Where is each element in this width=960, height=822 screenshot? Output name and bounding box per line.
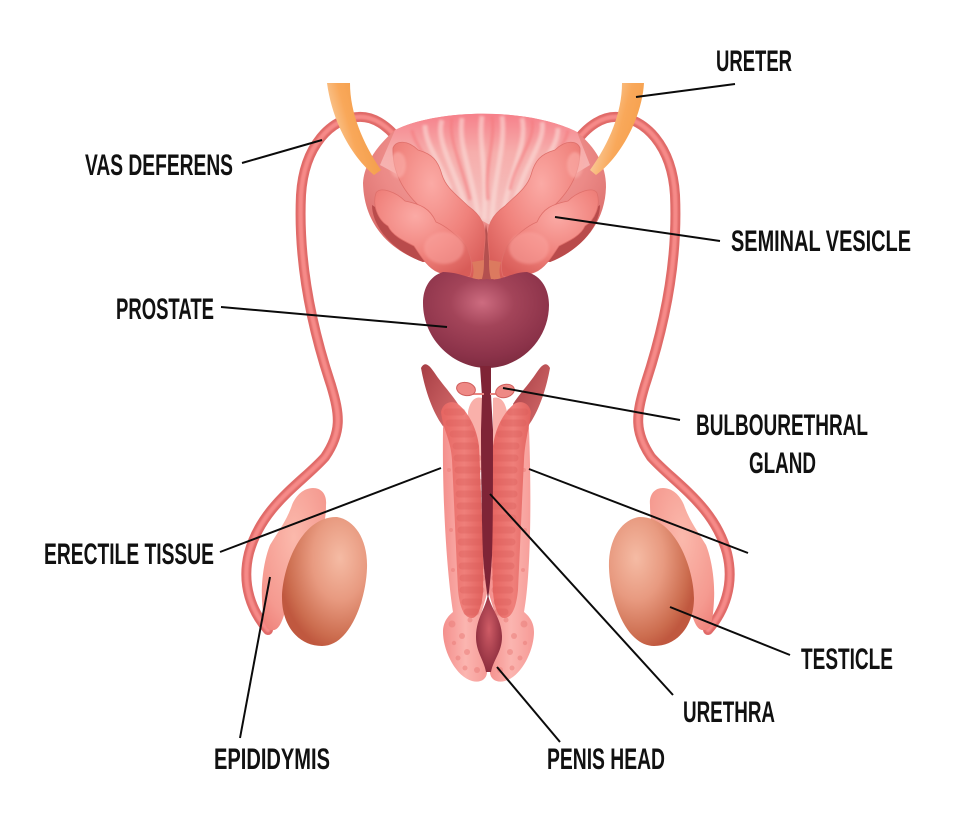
right ureter [590, 83, 644, 175]
label: bulbourethral gland: GLAND [749, 447, 816, 480]
right seminal vesicle [488, 142, 598, 280]
bulbourethral glands [455, 381, 516, 400]
label: testicle: TESTICLE [801, 643, 893, 676]
left testicle and epididymis [262, 488, 367, 646]
urethra [480, 366, 493, 600]
left crus [421, 364, 458, 432]
left ureter [327, 83, 381, 175]
label: ureter: URETER [716, 45, 792, 78]
corpus ridges [447, 412, 525, 612]
right vas deferens [573, 117, 730, 630]
illustration: reproductive anatomy [246, 83, 730, 682]
label: epididymis: EPIDIDYMIS [214, 743, 330, 776]
right corpus [492, 402, 531, 618]
label: erectile tissue: ERECTILE TISSUE [44, 538, 214, 571]
left vas deferens [246, 117, 403, 630]
bladder [363, 114, 606, 282]
label: vas deferens: VAS DEFERENS [85, 149, 233, 182]
left corpus [441, 402, 483, 618]
head speckles [447, 468, 528, 673]
leader lines [220, 84, 790, 742]
label: urethra: URETHRA [683, 696, 775, 729]
prostate [423, 272, 549, 368]
right testicle and epididymis [609, 488, 714, 646]
left erectile body [443, 410, 488, 682]
right crus [513, 364, 550, 432]
label: penis head: PENIS HEAD [547, 743, 665, 776]
head bulb [476, 594, 502, 672]
right erectile body [488, 410, 534, 682]
left seminal vesicle [375, 142, 485, 280]
penis shaft and head [421, 364, 550, 682]
label: bulbourethral gland: BULBOURETHRAL [696, 409, 868, 442]
label: bulbourethral gland [696, 409, 868, 480]
pale upper bulbs [468, 398, 507, 470]
label: prostate: PROSTATE [116, 293, 214, 326]
